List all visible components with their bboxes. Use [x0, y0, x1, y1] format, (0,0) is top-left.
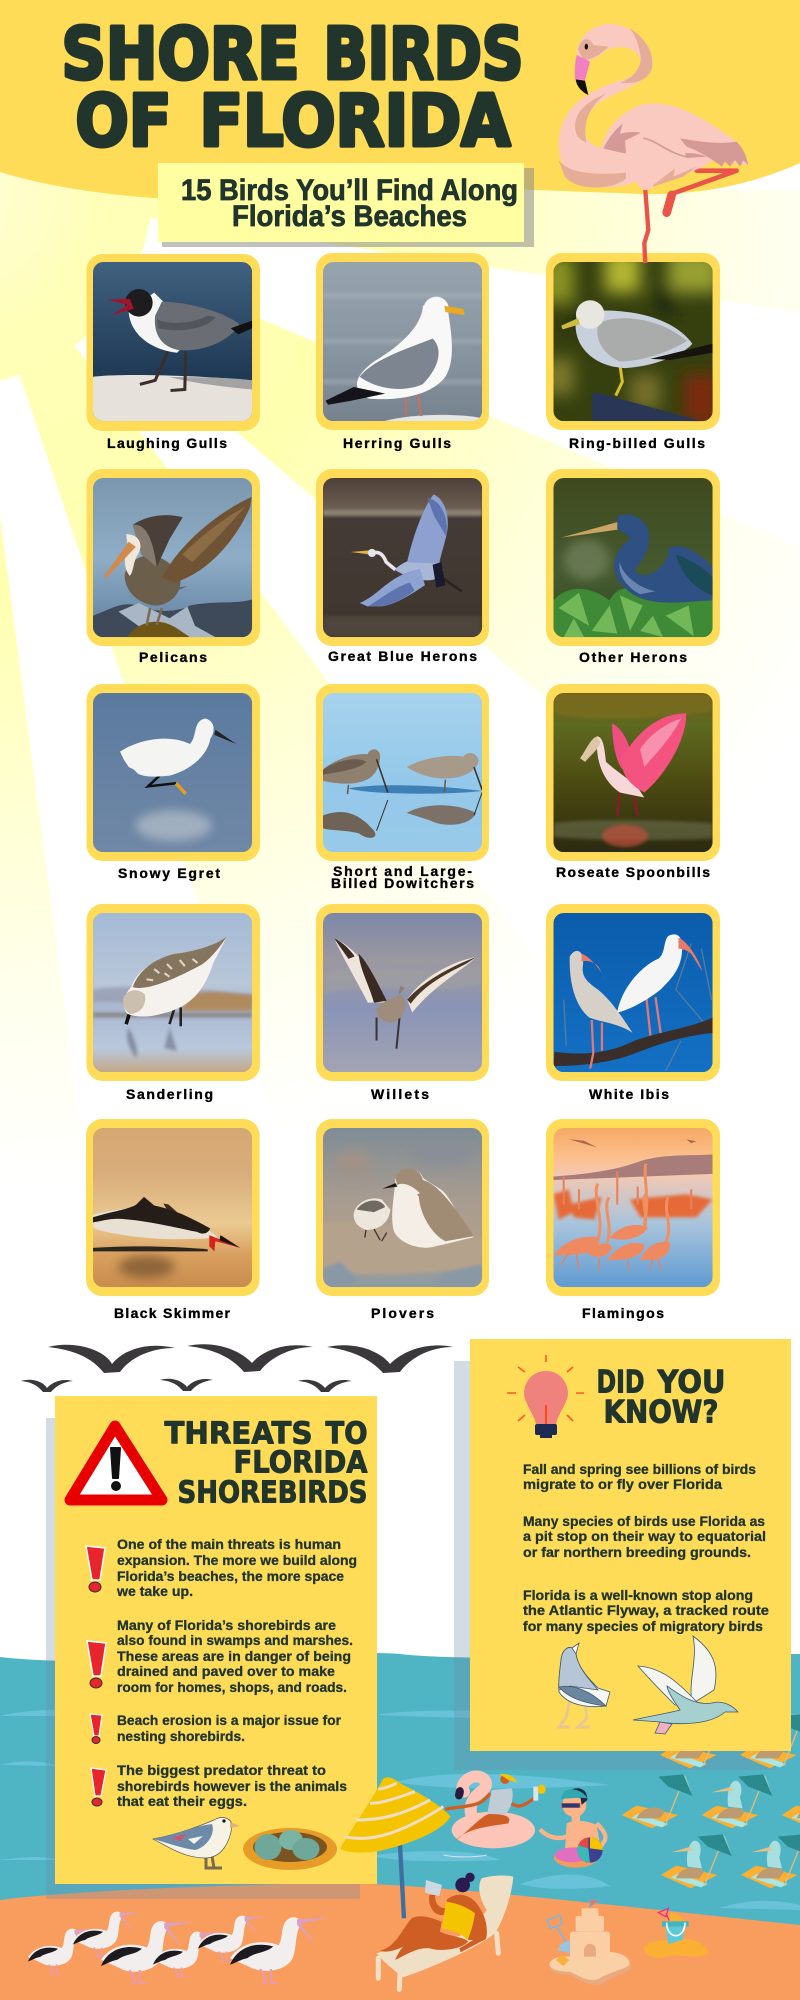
threats heading: TO: [326, 1416, 368, 1452]
card: Plovers: [316, 1119, 489, 1321]
fact 3: for many species of migratory birds: [523, 1618, 763, 1634]
did you know heading: DID: [596, 1364, 644, 1400]
threat text 2: also found in swamps and marshes.: [117, 1632, 353, 1648]
card: Sanderling: Sanderling: [126, 1086, 213, 1102]
threat text 2: Many of Florida’s shorebirds are: [117, 1617, 336, 1633]
threat text 1: expansion. The more we build along: [117, 1552, 357, 1568]
fact 1: Fall and spring see billions of birds: [523, 1461, 756, 1477]
panel: threats to Florida shorebirds: [55, 1396, 377, 1884]
card: Other Herons: [546, 469, 720, 665]
icon: light bulb: [507, 1355, 584, 1438]
title: [62, 12, 524, 162]
icon: cartoon gull: [153, 1818, 240, 1868]
threats heading: THREATS: [164, 1416, 312, 1452]
card: Ring-billed Gulls: Ring-billed Gulls: [569, 435, 705, 451]
threat text 4: that eat their eggs.: [117, 1793, 247, 1809]
boy with donut float and ball: [540, 1788, 605, 1868]
threat text 1: [116, 1536, 357, 1599]
threats heading: [164, 1416, 368, 1510]
card: Roseate Spoonbills: [546, 684, 720, 880]
card: Laughing Gulls: [86, 254, 260, 451]
card: Black Skimmer: Black Skimmer: [114, 1305, 231, 1321]
header yellow wave: [0, 0, 800, 201]
title: BIRDS: [324, 12, 524, 96]
threat text 3: [117, 1712, 342, 1744]
icon: exclamation 4: [91, 1768, 106, 1806]
threat text 2: room for homes, shops, and roads.: [117, 1679, 347, 1695]
icon: exclamation 1: [86, 1546, 105, 1592]
icon: flying gull: [633, 1636, 738, 1734]
threat text 2: [117, 1617, 353, 1695]
did you know heading: YOU: [657, 1364, 726, 1400]
card: Plovers: Plovers: [371, 1305, 434, 1321]
fact 3: [523, 1587, 769, 1634]
card: Short and Large-Billed Dowitchers: [316, 684, 489, 891]
threat text 1: we take up.: [116, 1583, 193, 1599]
card: Flamingos: Flamingos: [582, 1305, 664, 1321]
card: Snowy Egret: [86, 684, 260, 881]
ocean water: [0, 1653, 800, 1940]
title: OF: [76, 80, 172, 162]
card: Black Skimmer: [86, 1119, 260, 1321]
card: Pelicans: [86, 469, 260, 665]
icon: standing gull: [559, 1643, 610, 1727]
card: Willets: [316, 904, 489, 1102]
icon: exclamation 3: [90, 1714, 102, 1744]
subtitle banner: Florida’s Beaches: [232, 200, 467, 233]
card: Flamingos: [546, 1119, 720, 1321]
beach gull loungers: [622, 1714, 800, 1888]
card: Great Blue Herons: Great Blue Herons: [328, 648, 477, 664]
title: SHORE: [62, 12, 300, 96]
card: Ring-billed Gulls: [543, 252, 720, 451]
icon: nest with eggs: [243, 1828, 337, 1870]
threat text 4: [117, 1762, 347, 1809]
card: White Ibis: [546, 904, 720, 1102]
fact 2: a pit stop on their way to equatorial: [523, 1528, 766, 1544]
panel: did you know: [470, 1339, 791, 1751]
sandcastle and shovel: [547, 1899, 631, 1985]
card: Snowy Egret: Snowy Egret: [118, 865, 220, 881]
threat text 4: The biggest predator threat to: [117, 1762, 326, 1778]
bucket and puddle: [643, 1908, 708, 1958]
fact 2: [523, 1513, 766, 1560]
title: FLORIDA: [200, 80, 511, 162]
card: Pelicans: Pelicans: [139, 649, 207, 665]
threats heading: FLORIDA: [234, 1446, 368, 1480]
card: Short and Large-Billed Dowitchers: Short and Large-: [333, 863, 472, 879]
threat text 1: One of the main threats is human: [117, 1536, 341, 1552]
card: Roseate Spoonbills: Roseate Spoonbills: [556, 864, 710, 880]
woman on flamingo float: [443, 1774, 546, 1857]
threat text 4: shorebirds however is the animals: [117, 1778, 347, 1794]
threat text 2: drained and paved over to make: [117, 1663, 335, 1679]
woman on lounge chair: [377, 1873, 513, 1989]
did you know heading: KNOW?: [604, 1394, 718, 1430]
panel shadows: [46, 1361, 776, 1899]
icon: exclamation 2: [87, 1641, 106, 1688]
did you know heading: [596, 1364, 726, 1430]
icon: warning triangle: [70, 1426, 162, 1500]
flamingo illustration: [558, 24, 748, 263]
threat text 3: nesting shorebirds.: [117, 1728, 245, 1744]
fact 2: or far northern breeding grounds.: [523, 1544, 751, 1560]
fact 1: [523, 1461, 756, 1492]
flying birds silhouettes: [21, 1344, 453, 1392]
subtitle banner: 15 Birds You’ll Find Along: [181, 174, 518, 207]
card: Willets: Willets: [371, 1086, 429, 1102]
card: White Ibis: White Ibis: [589, 1086, 669, 1102]
card: Herring Gulls: [316, 253, 489, 451]
fact 1: migrate to or fly over Florida: [523, 1476, 722, 1492]
card: Laughing Gulls: Laughing Gulls: [107, 435, 227, 451]
subtitle banner: [158, 163, 534, 247]
fact 3: Florida is a well-known stop along: [523, 1587, 753, 1603]
beach umbrella: [340, 1777, 451, 1918]
card: Herring Gulls: Herring Gulls: [343, 435, 451, 451]
threat text 2: These areas are in danger of being: [117, 1648, 351, 1664]
pelicans row: [28, 1912, 327, 1983]
threat text 3: Beach erosion is a major issue for: [117, 1712, 342, 1728]
fact 2: Many species of birds use Florida as: [523, 1513, 765, 1529]
card: Other Herons: Other Herons: [579, 649, 687, 665]
card: Short and Large-Billed Dowitchers: Billed Dowitchers: [331, 875, 474, 891]
threat text 1: Florida’s beaches, the more space: [117, 1568, 344, 1584]
fact 3: the Atlantic Flyway, a tracked route: [523, 1602, 769, 1618]
card: Great Blue Herons: [316, 469, 489, 664]
beach sand: [0, 1883, 800, 2000]
card: Sanderling: [86, 904, 260, 1102]
threats heading: SHOREBIRDS: [178, 1476, 368, 1510]
